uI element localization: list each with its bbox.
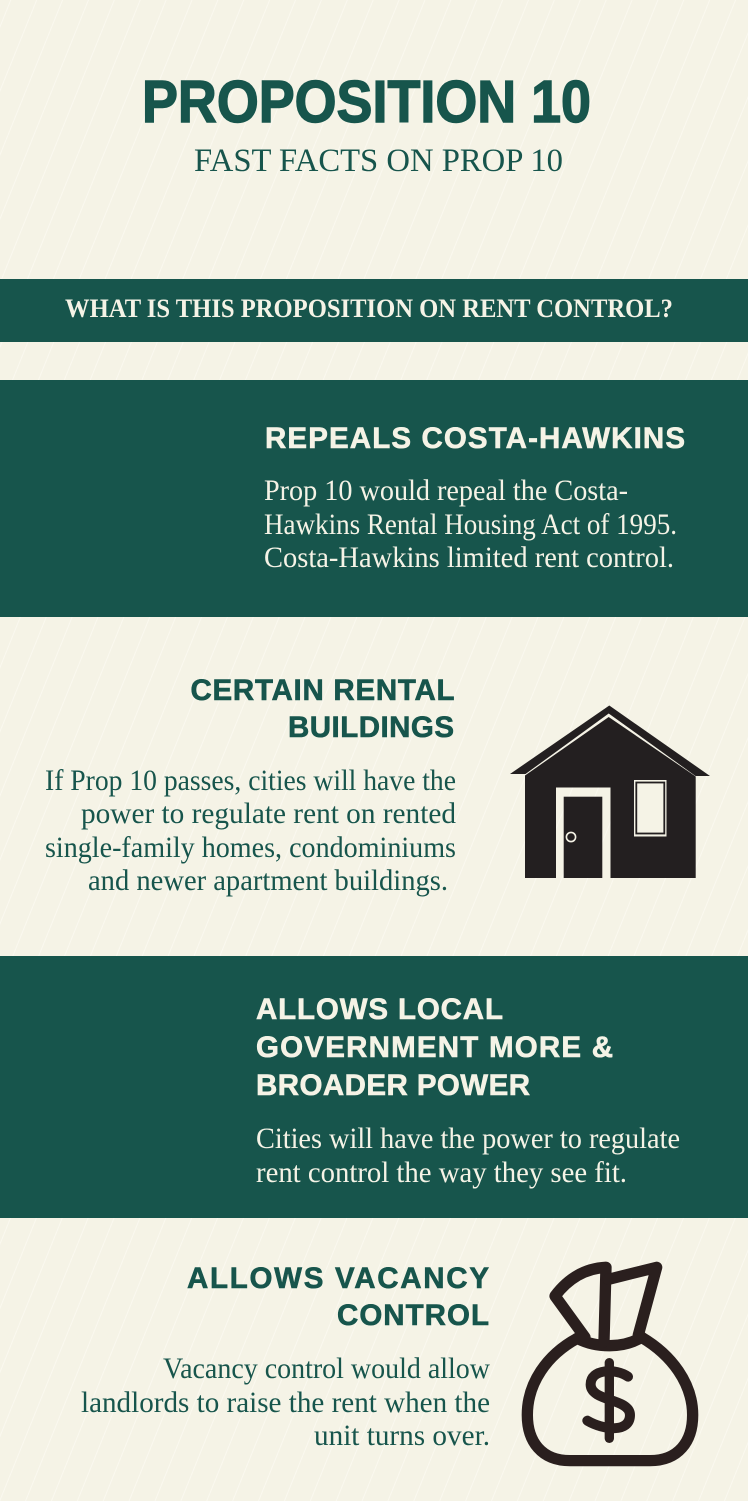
icon: money bag [527,1267,693,1461]
heading: allows local government: BROADER POWER [256,1069,530,1102]
text block: vacancy control description [81,1353,491,1452]
heading: allows local government: GOVERNMENT MORE & [256,1031,613,1064]
heading: allows local government [256,993,613,1102]
text block: rental buildings description [45,765,456,897]
banner: question [0,279,748,342]
panel: repeals Costa-Hawkins [0,380,748,617]
heading: allows vacancy control: ALLOWS VACANCY [187,1262,489,1295]
text block: rental buildings description: and newer apartment buildings. [88,865,448,897]
text block: vacancy control description: Vacancy control would allow [163,1353,491,1385]
heading: allows local government: ALLOWS LOCAL [256,993,503,1026]
text block: rental buildings description: single-family homes, condominiums [45,832,456,864]
subtitle: FAST FACTS ON PROP 10 [194,143,563,179]
heading: certain rental buildings: BUILDINGS [288,711,454,744]
text block: repeal description: Hawkins Rental Housing Act of 1995. [264,509,677,541]
text block: local government description: Cities will have the power to regulate [256,1123,680,1155]
banner: question: WHAT IS THIS PROPOSITION ON RENT CONTROL? [65,293,673,323]
icon: house [510,706,710,878]
heading: allows vacancy control [187,1262,489,1332]
title: PROPOSITION 10 [142,69,591,135]
text block: local government description: rent control the way they see fit. [256,1157,627,1189]
text block: local government description [256,1123,680,1189]
panel: certain rental buildings [45,674,710,897]
heading: certain rental buildings: CERTAIN RENTAL [190,674,454,707]
text block: repeal description [264,475,677,574]
text block: rental buildings description: power to regulate rent on rented [81,798,456,830]
text block: vacancy control description: landlords to raise the rent when the [81,1387,490,1419]
text block: vacancy control description: unit turns over. [314,1420,490,1452]
heading: repeals Costa-Hawkins: REPEALS COSTA-HAWKINS [265,422,685,455]
text block: rental buildings description: If Prop 10 passes, cities will have the [45,765,456,797]
text block: repeal description: Costa-Hawkins limited rent control. [264,542,674,574]
panel: allows vacancy control [81,1262,693,1461]
heading: allows vacancy control: CONTROL [337,1299,489,1332]
text block: repeal description: Prop 10 would repeal the Costa- [264,475,628,507]
heading: certain rental buildings [190,674,454,744]
panel: allows local government power [0,956,748,1218]
